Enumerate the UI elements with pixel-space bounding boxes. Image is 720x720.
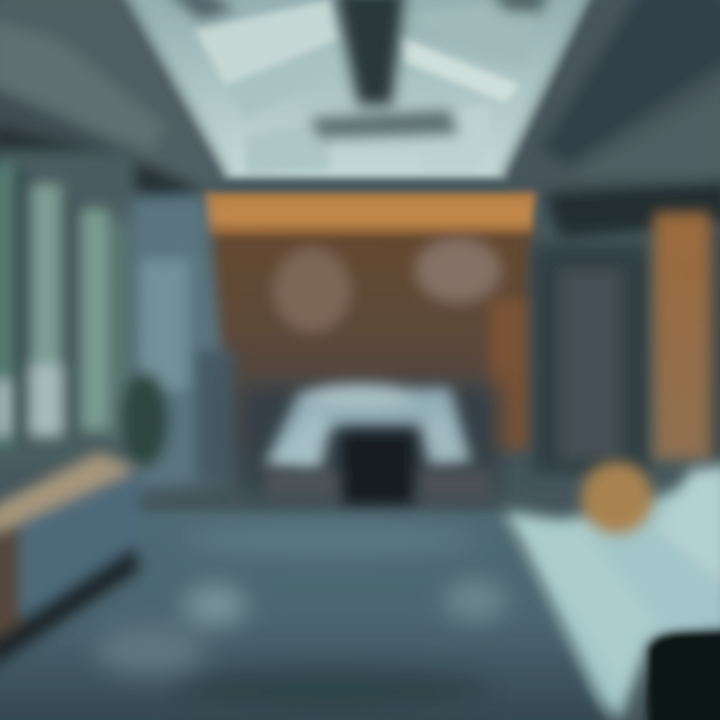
- skylight dark beams: [165, 0, 550, 138]
- wall lamp right: [416, 238, 500, 302]
- orange ceiling band: [205, 193, 535, 235]
- floor light patches: [95, 524, 507, 710]
- right ceiling: [502, 0, 720, 238]
- right sofa: [505, 465, 720, 720]
- wall lamp left: [274, 248, 350, 332]
- right dark panel: [532, 245, 650, 475]
- right wood pillar: [654, 212, 720, 460]
- left ceiling: [0, 0, 228, 215]
- left bench: [0, 452, 140, 670]
- left pillar: [121, 195, 235, 490]
- bed side grey: [265, 470, 337, 498]
- skylight ceiling: [118, 0, 595, 178]
- floor: [0, 512, 612, 720]
- left window wall: [0, 150, 135, 470]
- orange cushion: [581, 462, 653, 534]
- bed linens: [265, 384, 472, 470]
- back wall: [210, 225, 532, 450]
- bed side right grey: [420, 470, 492, 498]
- bed dark centre: [342, 432, 414, 504]
- bed base: [240, 385, 500, 495]
- bed: [240, 384, 500, 504]
- dark foreground object: [645, 628, 720, 720]
